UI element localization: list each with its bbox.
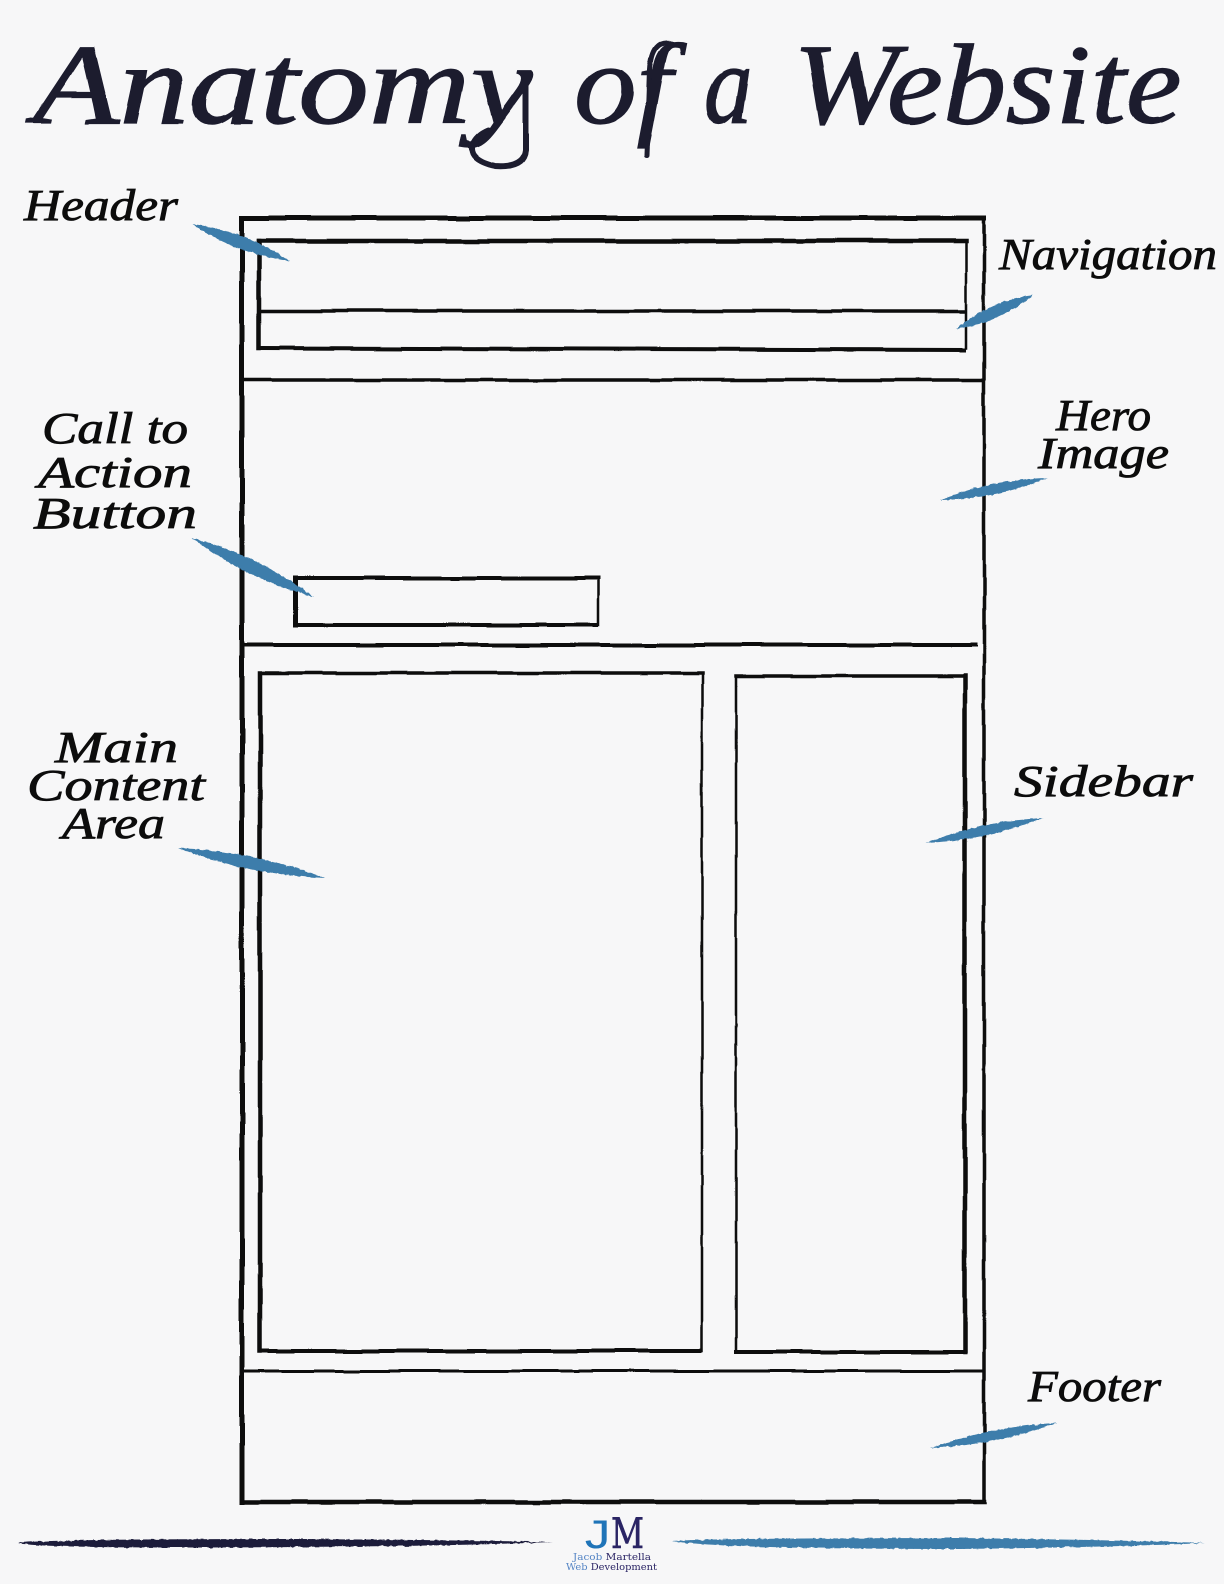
arrow: Main Content Area xyxy=(178,848,325,878)
label: Hero Image: Hero xyxy=(1055,391,1151,440)
title: of xyxy=(574,21,687,148)
label: Main Content Area xyxy=(27,723,207,848)
label: Main Content Area: Content xyxy=(27,761,207,810)
title: a xyxy=(704,21,752,148)
label: Navigation: Navigation xyxy=(998,230,1217,279)
footer brush stroke: dark xyxy=(18,1539,553,1548)
website wireframe xyxy=(242,218,984,1502)
wireframe: navigation bar divider xyxy=(260,309,965,313)
wireframe: hero image top divider xyxy=(243,378,983,382)
title xyxy=(24,21,1182,166)
wireframe: call to action button xyxy=(295,578,598,625)
label: Hero Image: Image xyxy=(1037,429,1169,478)
logo monogram xyxy=(581,1509,644,1561)
label: Main Content Area: Main xyxy=(54,723,178,772)
arrow: Sidebar xyxy=(926,818,1043,843)
wireframe: sidebar xyxy=(736,676,965,1352)
arrow: Call to Action Button xyxy=(192,538,314,597)
label: Call to Action Button: Button xyxy=(33,489,197,538)
label: Main Content Area: Area xyxy=(58,799,165,848)
wireframe: outer page frame xyxy=(242,218,984,1502)
arrow: Footer xyxy=(931,1423,1057,1448)
title: Website xyxy=(793,21,1182,148)
arrow: Navigation xyxy=(956,295,1033,329)
wireframe: main content area xyxy=(260,673,702,1351)
footer brush stroke: blue xyxy=(672,1538,1205,1549)
wireframe: hero image bottom divider xyxy=(243,643,975,647)
label: Footer: Footer xyxy=(1027,1362,1162,1411)
logo monogram: M xyxy=(611,1509,644,1558)
arrow: Header xyxy=(192,224,290,261)
logo: Jacob Martella Web Development xyxy=(566,1509,657,1573)
wireframe: header box xyxy=(259,241,966,350)
label: Sidebar: Sidebar xyxy=(1014,757,1194,806)
logo name: Jacob Martella xyxy=(572,1552,651,1563)
wireframe: footer top divider xyxy=(243,1370,983,1372)
label: Call to Action Button: Action xyxy=(34,448,192,497)
label: Hero Image xyxy=(1037,391,1169,478)
label: Call to Action Button xyxy=(33,404,197,538)
label: Header: Header xyxy=(23,181,179,230)
title: Anatomy xyxy=(24,21,533,148)
logo tagline: Web Development xyxy=(566,1562,657,1573)
label: Call to Action Button: Call to xyxy=(42,404,188,453)
arrow: Hero Image xyxy=(940,478,1048,500)
logo monogram: J xyxy=(581,1513,613,1561)
